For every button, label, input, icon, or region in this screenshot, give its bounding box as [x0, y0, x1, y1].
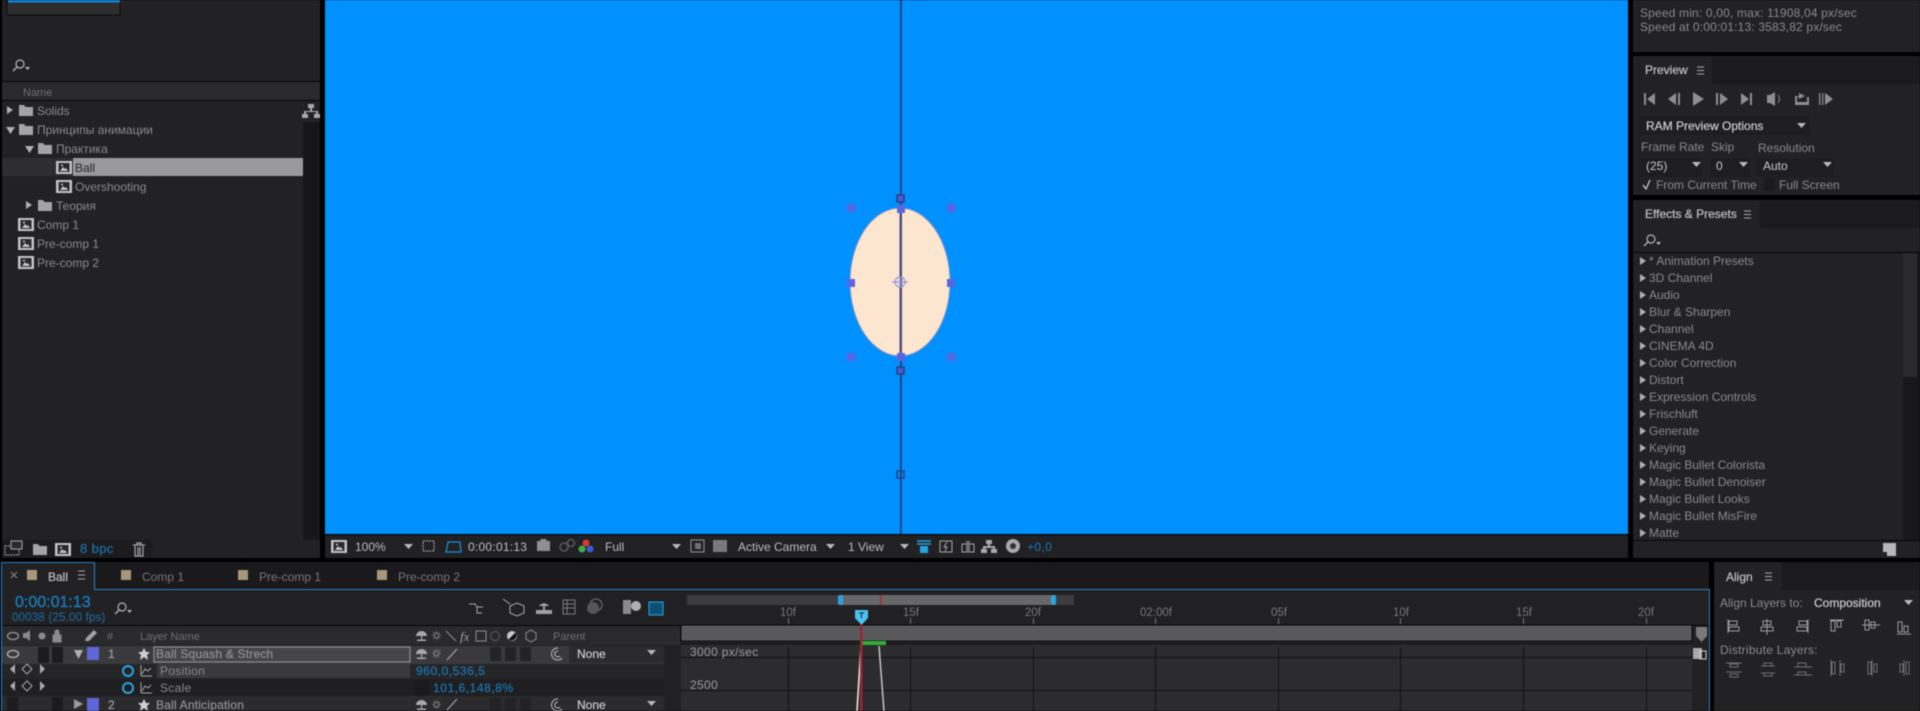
layer header: Parent [553, 631, 585, 643]
speed readout [1640, 6, 1857, 34]
project item: Pre-comp 2: Pre-comp 2 [37, 256, 99, 270]
project item: practice [25, 142, 108, 156]
preview labels: Frame Rate [1641, 140, 1705, 154]
effects list: Color Correction [1649, 356, 1736, 370]
viewer toolbar: +0,0 [1027, 540, 1052, 554]
align layers to [1720, 596, 1913, 610]
panel: composition viewer [325, 0, 1628, 534]
time navigator [687, 595, 1074, 605]
right timeline controls [1693, 627, 1707, 659]
tab: Ball: Ball [48, 570, 68, 584]
icon: rgb [578, 540, 594, 552]
search icon [13, 60, 30, 71]
speed curves [857, 646, 884, 711]
current time: 00038 (25.00 fps) [12, 612, 106, 624]
anchor point [892, 277, 908, 287]
position row [2, 664, 664, 679]
timeline outline [2, 562, 1710, 711]
layer header: Layer Name [140, 631, 200, 643]
search icon [1644, 235, 1661, 246]
project item: theory [26, 199, 96, 213]
graph area [681, 641, 1692, 711]
project item: Comp 1: Comp 1 [37, 218, 79, 232]
project item: Solids [7, 104, 70, 118]
ruler labels: 20f [1638, 607, 1655, 619]
tab: Pre-comp 2: Pre-comp 2 [398, 570, 460, 584]
panel: timeline [2, 562, 1710, 711]
align layers to: Align Layers to: [1720, 596, 1803, 610]
project footer: 8 bpc [80, 541, 114, 556]
project item: Ball: Ball [75, 161, 95, 175]
scroll column [303, 122, 320, 540]
align title: Align [1726, 570, 1753, 584]
green bar [862, 641, 886, 645]
panel: info [1633, 0, 1920, 52]
align icons [1728, 619, 1911, 635]
icon: flowchart [302, 104, 320, 118]
RAM preview options: RAM Preview Options [1646, 119, 1763, 133]
preview dropdowns: (25) [1646, 159, 1667, 173]
thumbnail [7, 0, 120, 15]
viewer toolbar: 0:00:01:13 [468, 540, 527, 554]
project footer [2, 540, 152, 558]
scale row: Scale [160, 681, 192, 695]
layer header: # [107, 631, 114, 643]
position row: Position [160, 664, 205, 678]
preview title: Preview [1645, 63, 1688, 77]
viewer toolbar: Full [605, 540, 624, 554]
ruler labels [780, 607, 1655, 619]
ruler labels: 20f [1025, 607, 1042, 619]
preview checkboxes [1643, 178, 1840, 192]
effects list: Frischluft [1649, 407, 1698, 421]
effects list [1640, 254, 1766, 540]
viewer toolbar: Active Camera [738, 540, 817, 554]
effects list: Keying [1649, 441, 1686, 455]
current time: 0:00:01:13 [15, 594, 91, 611]
layer header [2, 625, 1709, 645]
layer 1 row: 1 [108, 647, 115, 661]
project item: theory: Теория [56, 199, 96, 213]
ruler labels: 05f [1271, 607, 1288, 619]
preview dropdowns: Auto [1763, 159, 1788, 173]
effects list: Magic Bullet Denoiser [1649, 475, 1766, 489]
scale row: 101,6,148,8% [433, 681, 514, 695]
graph labels: 3000 px/sec [690, 645, 759, 659]
panel: preview [1633, 56, 1920, 195]
preview dropdowns: 0 [1716, 159, 1723, 173]
playhead [855, 610, 868, 711]
search icon [115, 603, 132, 614]
preview checkboxes: From Current Time [1656, 178, 1757, 192]
graph labels [690, 645, 759, 692]
icon: camera [537, 539, 550, 551]
effects list: Magic Bullet Colorista [1649, 458, 1765, 472]
work area bar [681, 625, 1692, 641]
panel: effects and presets [1633, 200, 1920, 558]
scrollbar [1903, 253, 1920, 540]
motion path [900, 0, 902, 534]
selected row [2, 158, 303, 176]
effects list: CINEMA 4D [1649, 339, 1714, 353]
tab: Comp 1 [121, 570, 184, 584]
panel: project [2, 0, 320, 558]
layer 1 row [2, 646, 664, 664]
tab: Ball [11, 570, 85, 584]
ruler labels: 10f [1393, 607, 1410, 619]
ruler labels: 02:00f [1140, 607, 1173, 619]
layer 1 row: Ball Squash & Strech [156, 647, 273, 661]
viewer toolbar: 100% [355, 540, 386, 554]
project item: Ball [56, 161, 95, 175]
playback controls [1644, 92, 1833, 106]
preview labels: Skip [1711, 140, 1735, 154]
transform handles [847, 195, 955, 478]
icon: blue toggle [917, 541, 931, 544]
project item: Solids: Solids [37, 104, 70, 118]
icon: channels [560, 540, 574, 551]
effects list: * Animation Presets [1649, 254, 1754, 268]
layer 2 row [2, 696, 664, 711]
project item: principles: Принципы анимации [37, 123, 153, 137]
layer 1 row: None [577, 647, 606, 661]
effects list: Distort [1649, 373, 1684, 387]
distribute label: Distribute Layers: [1720, 643, 1818, 657]
scale row [2, 679, 664, 696]
effects title: Effects & Presets [1645, 207, 1737, 221]
effects list: Generate [1649, 424, 1699, 438]
effects list: 3D Channel [1649, 271, 1712, 285]
ball [850, 208, 950, 356]
preview labels [1641, 140, 1815, 155]
speed readout: Speed min: 0,00, max: 11908,04 px/sec [1640, 6, 1857, 20]
graph labels: 2500 [690, 678, 718, 692]
ruler labels: 10f [780, 607, 797, 619]
effects list: Matte [1649, 526, 1679, 540]
preview labels: Resolution [1758, 141, 1815, 155]
project item: Comp 1 [18, 218, 79, 232]
effects list: Magic Bullet MisFire [1649, 509, 1757, 523]
effects list: Channel [1649, 322, 1694, 336]
preview checkboxes: Full Screen [1779, 178, 1840, 192]
name header: Name [23, 87, 52, 99]
project item: Overshooting: Overshooting [75, 180, 146, 194]
project item: Pre-comp 1: Pre-comp 1 [37, 237, 99, 251]
speed readout: Speed at 0:00:01:13: 3583,82 px/sec [1640, 20, 1842, 34]
ruler labels: 15f [1516, 607, 1533, 619]
current time [12, 594, 106, 624]
effects list: Blur & Sharpen [1649, 305, 1730, 319]
position row: 960,0,536,5 [416, 664, 485, 678]
distribute icons [1726, 660, 1909, 677]
viewer toolbar [325, 535, 1628, 558]
effects list: Magic Bullet Looks [1649, 492, 1750, 506]
ruler labels: 15f [903, 607, 920, 619]
align title [1726, 570, 1772, 584]
viewer toolbar: 1 View [848, 540, 884, 554]
tab: Comp 1: Comp 1 [142, 570, 184, 584]
panel: align [1714, 562, 1920, 711]
timeline switches [469, 599, 663, 616]
effects list: Audio [1649, 288, 1680, 302]
layer header: fx [460, 629, 470, 644]
tab: Pre-comp 1: Pre-comp 1 [259, 570, 321, 584]
preview dropdowns [1640, 158, 1834, 177]
project item: practice: Практика [56, 142, 108, 156]
RAM preview options [1640, 116, 1810, 135]
effects list: Expression Controls [1649, 390, 1756, 404]
name header [2, 81, 320, 101]
effects footer [1633, 540, 1920, 558]
align layers to: Composition [1814, 596, 1881, 610]
